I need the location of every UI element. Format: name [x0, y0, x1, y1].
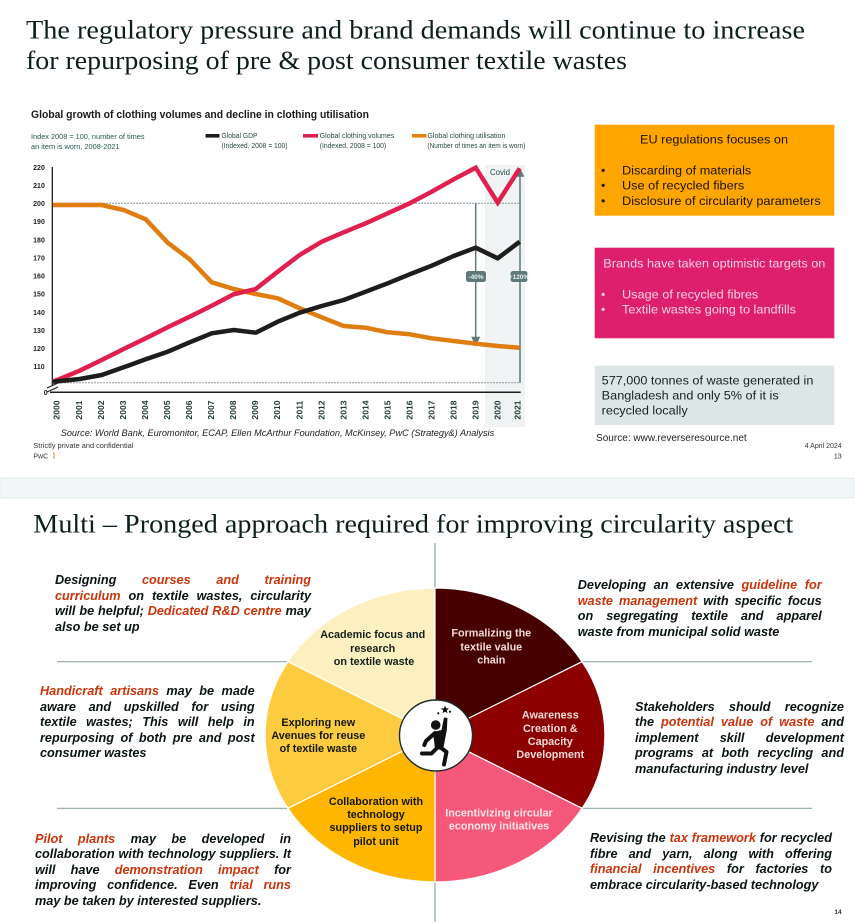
text block: courses and curriculum: [55, 573, 312, 634]
panel: Bangladesh waste: [595, 366, 834, 425]
text block: pilot plants: collaboration with technology suppliers. It: [35, 847, 291, 861]
text block: guideline: Developing an extensive guideline for: [578, 578, 822, 592]
quadrant lines: [57, 543, 812, 922]
segment: new avenues: of textile waste: [280, 743, 357, 755]
text block: pilot plants: Pilot plants may be developed in: [35, 832, 291, 846]
text block: pilot plants: may be taken by interested suppliers.: [35, 894, 261, 908]
panel: EU regulations: Disclosure of circularity parameters: [622, 194, 821, 208]
x axis labels: 2017: [427, 400, 437, 420]
panel: EU regulations: Discarding of materials: [622, 163, 751, 177]
panel: brand targets: Textile wastes going to landfills: [622, 303, 796, 317]
panel: brand targets: [595, 248, 834, 338]
x axis labels: 2004: [140, 400, 150, 420]
x axis labels: [52, 400, 522, 420]
panel: EU regulations: EU regulations focuses on: [640, 132, 788, 146]
text block: handicraft artisans: aware and upskilled for using: [40, 700, 255, 714]
chart legend: [206, 133, 525, 150]
segment: collaboration: [288, 735, 435, 882]
covid label: Covid: [490, 167, 510, 177]
date and page number: 4 April 2024: [805, 443, 842, 450]
segment: incentivizing: [435, 735, 582, 882]
x axis labels: 2015: [382, 400, 392, 420]
segment: awareness creation: Development: [516, 749, 585, 761]
x axis labels: 2019: [471, 400, 481, 420]
text block: handicraft artisans: textile wastes; This will help in: [40, 715, 255, 729]
chart legend: (Indexed, 2008 = 100): [320, 143, 386, 150]
chart legend: Global clothing utilisation: [427, 133, 506, 140]
panel: brand targets: •: [601, 303, 605, 317]
y axis labels: 180: [33, 238, 45, 244]
text block: courses and curriculum: also be set up: [55, 620, 140, 634]
segment: collaboration: suppliers to setup: [330, 822, 423, 834]
text block: courses and curriculum: Designing courses and training: [55, 573, 311, 587]
arrow: +120%: +120%: [509, 274, 529, 281]
segment: formalizing value chain: textile value: [460, 642, 522, 654]
text block: tax framework: [590, 831, 832, 892]
arrow: +120%: [509, 168, 529, 383]
panel: Bangladesh waste: 577,000 tonnes of waste generated in: [602, 373, 814, 387]
title: regulatory pressure: for repurposing of pre & post consumer textile wastes: [26, 45, 627, 75]
segment: academic focus: Academic focus and: [320, 629, 425, 641]
panel: EU regulations: •: [601, 179, 605, 193]
text block: stakeholders: the potential value of waste and: [635, 715, 844, 729]
segment: awareness creation: [435, 662, 605, 808]
x axis labels: 2005: [162, 400, 172, 420]
confidentiality footer: Strictly private and confidential: [33, 443, 134, 450]
panel: EU regulations: Use of recycled fibers: [622, 179, 744, 193]
chart source: Source: World Bank, Euromonitor, ECAP, Ellen McArthur Foundation, McKinsey, PwC (Strategy&) Analysis: [61, 428, 494, 439]
text block: guideline: [578, 578, 822, 639]
panel: Bangladesh waste: Bangladesh and only 5% of it is: [602, 389, 779, 403]
confidentiality footer: PwC: [33, 454, 48, 460]
text block: tax framework: Revising the tax framework for recycled: [590, 831, 832, 845]
text block: handicraft artisans: [40, 684, 256, 760]
text block: guideline: waste management with specific focus: [578, 594, 822, 608]
panel: Bangladesh waste: recycled locally: [602, 404, 689, 418]
y axis labels: 150: [33, 292, 45, 298]
date and page number: [805, 443, 842, 460]
chart subtitle: an item is worn, 2008-2021: [31, 142, 120, 151]
x axis labels: 2018: [449, 400, 459, 420]
panel: brand targets: Usage of recycled fibres: [622, 287, 758, 301]
text block: handicraft artisans: repurposing of both pre and post: [40, 731, 255, 745]
arrow: -40%: -40%: [468, 274, 484, 281]
text block: guideline: on segregating textile and apparel: [578, 609, 822, 623]
segment: new avenues: Exploring new: [281, 717, 356, 729]
text block: pilot plants: will have demonstration impact for: [35, 863, 291, 877]
panel: EU regulations: [595, 125, 834, 216]
segment: formalizing value chain: [435, 588, 582, 735]
text block: pilot plants: improving confidence. Even trial runs: [35, 878, 291, 892]
x axis labels: 2016: [404, 400, 414, 420]
chart legend: Global GDP: [222, 133, 258, 140]
icon: jumping figure reaching for star: [400, 700, 472, 771]
segment: new avenues: Avenues for reuse: [271, 730, 365, 742]
x axis labels: 2002: [96, 400, 106, 420]
y axis labels: 170: [33, 256, 45, 262]
text block: courses and curriculum: curriculum on textile wastes, circularity: [55, 589, 311, 603]
y axis labels: 190: [33, 219, 45, 226]
arrow: -40%: [466, 203, 486, 347]
segment: awareness creation: Capacity: [528, 736, 573, 748]
panel: brand targets: Brands have taken optimistic targets on: [603, 256, 825, 270]
text block: stakeholders: implement skill development: [635, 731, 844, 745]
segment: incentivizing: economy initiatives: [449, 820, 549, 832]
chart subtitle: [31, 132, 145, 151]
text block: handicraft artisans: Handicraft artisans may be made: [40, 684, 255, 698]
text block: stakeholders: manufacturing industry level: [635, 762, 808, 776]
y axis labels: 130: [33, 328, 45, 335]
panel source: Source: www.reverseresource.net: [596, 433, 747, 444]
text block: guideline: waste from municipal solid waste: [578, 625, 779, 639]
segment: formalizing value chain: chain: [477, 654, 505, 666]
y axis labels: 120: [33, 346, 45, 353]
y axis labels: 220: [33, 165, 45, 172]
series: clothing volumes: [53, 168, 520, 382]
segment: academic focus: research: [350, 643, 395, 655]
text block: stakeholders: [634, 700, 844, 776]
x axis labels: 2001: [74, 400, 84, 420]
text block: stakeholders: Stakeholders should recognize: [635, 700, 844, 714]
x axis labels: 2008: [228, 400, 238, 420]
x axis labels: 2011: [294, 400, 304, 419]
y axis labels: [33, 165, 48, 397]
chart subtitle: Index 2008 = 100, number of times: [31, 132, 145, 141]
x axis labels: 2010: [272, 400, 282, 420]
chart legend: (Indexed, 2008 = 100): [222, 143, 288, 150]
slide divider band: [0, 478, 855, 498]
y axis labels: 210: [33, 183, 45, 190]
y axis labels: 110: [33, 364, 45, 371]
y axis labels: 200: [33, 201, 45, 208]
x axis labels: 2006: [184, 400, 194, 420]
confidentiality footer: [33, 443, 134, 460]
series: global GDP: [53, 242, 520, 382]
y axis labels: 140: [33, 310, 45, 317]
text block: tax framework: financial incentives for factories to: [590, 862, 832, 876]
x axis labels: 2014: [360, 400, 370, 420]
date and page number: 13: [834, 454, 842, 460]
panel: EU regulations: •: [601, 194, 605, 208]
x axis labels: 2020: [493, 400, 503, 420]
series: clothing utilisation: [53, 205, 520, 348]
text block: stakeholders: programs at both recycling and: [635, 746, 844, 760]
title: regulatory pressure: The regulatory pressure and brand demands will continue to increase: [26, 14, 805, 44]
text block: tax framework: fibre and yarn, along with offering: [590, 847, 832, 861]
segment: academic focus: on textile waste: [334, 656, 414, 668]
panel: brand targets: •: [601, 287, 605, 301]
segment: academic focus: [288, 588, 435, 735]
segment: new avenues: [265, 662, 435, 808]
segment: collaboration: pilot unit: [353, 836, 399, 848]
page number: 14: [834, 909, 842, 916]
x axis labels: 2021: [512, 400, 522, 420]
text block: tax framework: embrace circularity-based technology: [590, 878, 818, 892]
x axis labels: 2007: [206, 400, 216, 420]
x axis labels: 2009: [250, 400, 260, 420]
x axis labels: 2013: [338, 400, 348, 420]
text block: pilot plants: [35, 832, 292, 908]
segment: formalizing value chain: Formalizing the: [451, 628, 531, 640]
line chart: [33, 165, 529, 427]
segment: awareness creation: Awareness: [522, 710, 579, 722]
text block: courses and curriculum: will be helpful; Dedicated R&D centre may: [55, 604, 311, 618]
x axis labels: 2003: [118, 400, 128, 420]
chart legend: (Number of times an item is worn): [427, 143, 525, 150]
x axis labels: 2012: [316, 400, 326, 420]
chart legend: Global clothing volumes: [320, 133, 395, 140]
pie diagram: [265, 588, 605, 882]
segment: collaboration: technology: [347, 809, 405, 821]
x axis labels: 2000: [52, 400, 62, 420]
y axis labels: 0: [44, 390, 48, 397]
segment: awareness creation: Creation &: [523, 723, 578, 735]
segment: collaboration: Collaboration with: [329, 796, 423, 808]
title: multi-pronged: Multi – Pronged approach required for improving circularity aspect: [33, 510, 794, 538]
text block: handicraft artisans: consumer wastes: [40, 746, 146, 760]
panel: EU regulations: •: [601, 163, 605, 177]
segment: incentivizing: Incentivizing circular: [445, 808, 553, 820]
chart heading: Global growth of clothing volumes and decline in clothing utilisation: [31, 109, 369, 121]
y axis labels: 160: [33, 274, 45, 280]
title: regulatory pressure: [26, 14, 805, 75]
